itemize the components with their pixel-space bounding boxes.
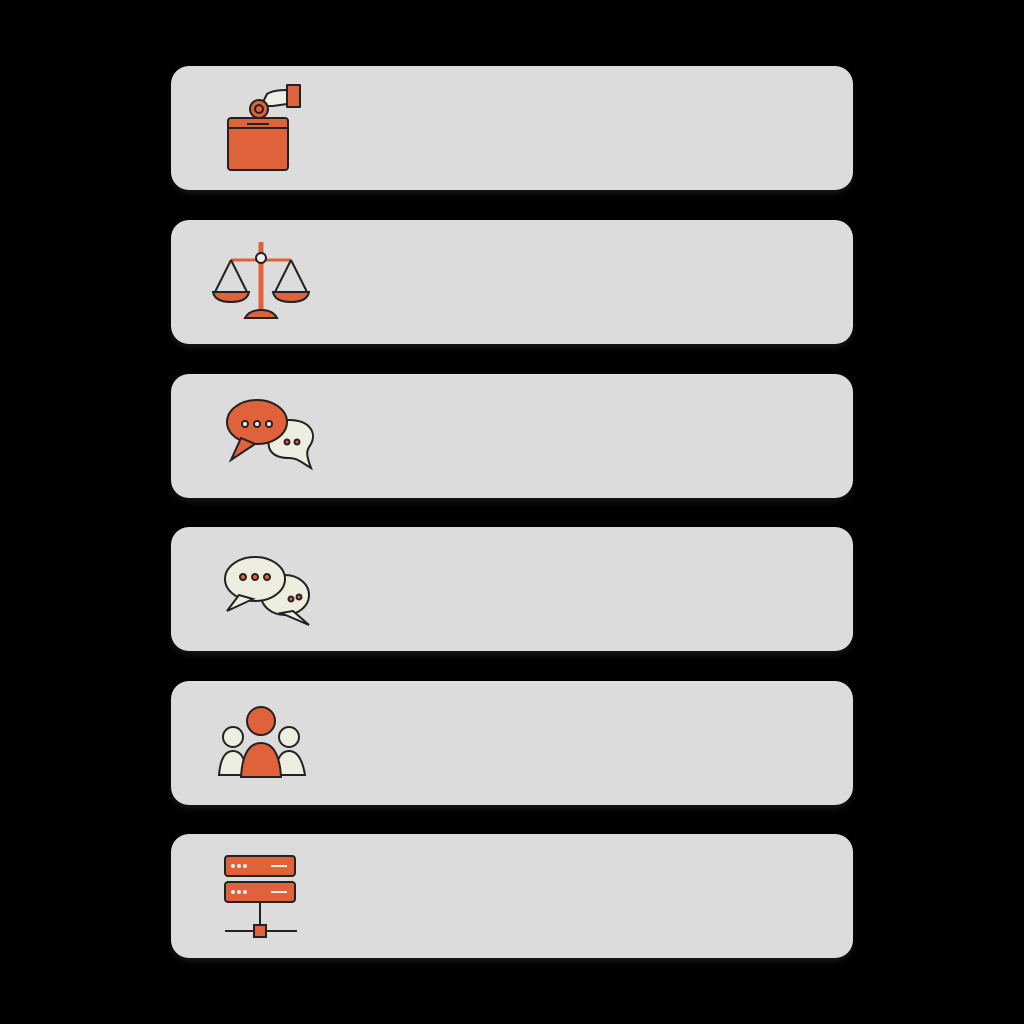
icon: chat bubbles light: [224, 556, 310, 626]
icon: people: [218, 706, 306, 778]
panel: network: [171, 834, 853, 958]
panel: community: [171, 681, 853, 805]
icon: server: [224, 855, 297, 938]
panel: discussion: [171, 374, 853, 498]
icon: ballot box: [227, 84, 301, 171]
icon: scales: [212, 242, 310, 319]
panel: ballot: [171, 66, 853, 190]
panel: debate: [171, 527, 853, 651]
icon: chat bubbles orange: [226, 399, 314, 470]
panel: justice: [171, 220, 853, 344]
